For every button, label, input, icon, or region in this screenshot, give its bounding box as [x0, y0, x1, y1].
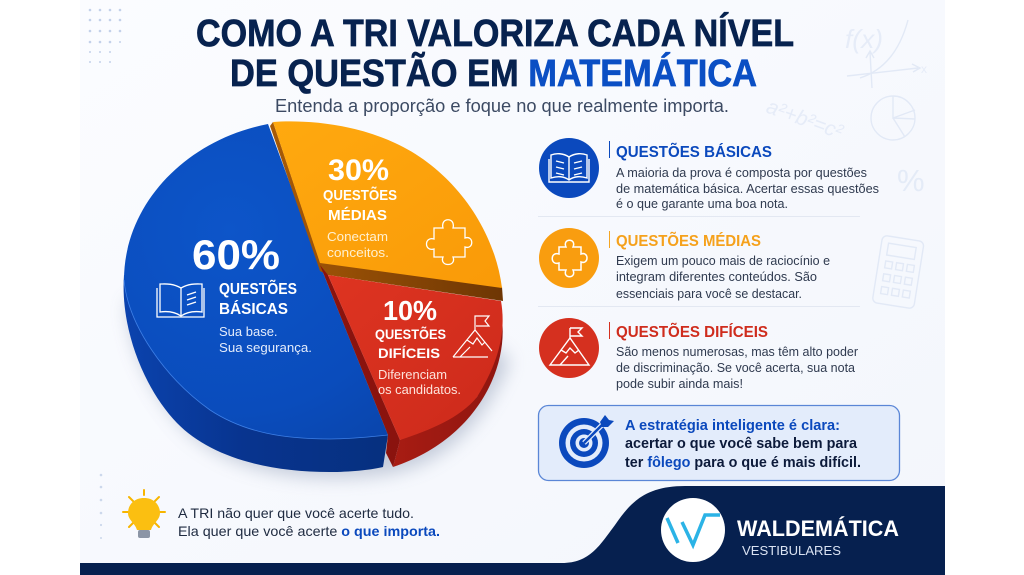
takeaway text: Ela quer que você acerte o que importa.: [178, 523, 440, 539]
item: questões básicas: [539, 138, 879, 211]
label: 10%: [375, 295, 461, 397]
description: [616, 166, 879, 211]
footer band: [80, 486, 945, 575]
label: 10%: Diferenciam: [378, 367, 447, 382]
label: 30%: QUESTÕES: [323, 186, 397, 204]
logo tagline: VESTIBULARES: [742, 543, 841, 558]
icon: open book: [157, 284, 204, 317]
label: 60%: QUESTÕES: [219, 280, 297, 298]
description: integram diferentes conteúdos. São: [616, 270, 817, 284]
callout text: ter fôlego para o que é mais difícil.: [625, 454, 861, 471]
slice: 30% médias: [270, 121, 503, 301]
description: A maioria da prova é composta por questões: [616, 166, 867, 180]
icon: puzzle badge: [539, 228, 599, 288]
title: [196, 11, 794, 95]
title: COMO A TRI VALORIZA CADA NÍVEL: [196, 11, 794, 55]
label: 10%: 10%: [383, 295, 437, 326]
slice: 10% difíceis: [320, 265, 503, 467]
takeaway text: A TRI não quer que você acerte tudo.: [178, 505, 414, 521]
label: 60%: [192, 231, 312, 355]
description: Exigem um pouco mais de raciocínio e: [616, 254, 830, 268]
label: 60%: BÁSICAS: [219, 301, 288, 318]
icon: light bulb: [123, 490, 165, 538]
label: 30%: Conectam: [327, 229, 388, 244]
callout text: A estratégia inteligente é clara:: [625, 417, 840, 434]
pie chart: [124, 121, 510, 478]
decorative dot grid top left: [89, 9, 121, 63]
pie drop shadow: [128, 300, 510, 478]
heading: QUESTÕES MÉDIAS: [616, 230, 761, 250]
description: essenciais para você se destacar.: [616, 287, 802, 301]
subtitle: Entenda a proporção e foque no que realmente importa.: [275, 96, 729, 116]
label: 60%: Sua segurança.: [219, 340, 312, 355]
item: questões difíceis: [539, 318, 858, 391]
icon: target: [559, 415, 614, 468]
label: 30%: 30%: [328, 154, 389, 187]
description: pode subir ainda mais!: [616, 377, 743, 391]
heading: QUESTÕES DIFÍCEIS: [616, 321, 768, 341]
description: [616, 345, 858, 391]
icon: book badge: [539, 138, 599, 198]
logo: Waldemática: [661, 498, 899, 562]
takeaway text: [178, 505, 440, 539]
icon: puzzle piece: [426, 220, 472, 264]
callout: estratégia: [538, 406, 900, 480]
description: de discriminação. Se você acerta, sua nota: [616, 361, 855, 375]
callout text: [625, 417, 861, 471]
slice: 60% básicas: [124, 124, 388, 472]
description: São menos numerosas, mas têm alto poder: [616, 345, 858, 359]
description: de matemática básica. Acertar essas questões: [616, 182, 879, 196]
label: 30%: conceitos.: [327, 245, 389, 260]
description: é o que garante uma boa nota.: [616, 197, 788, 211]
accent bar: [609, 231, 610, 248]
item: questões médias: [539, 228, 830, 301]
label: 10%: DIFÍCEIS: [378, 345, 440, 361]
label: 10%: os candidatos.: [378, 382, 461, 397]
icon: mountain with flag: [453, 316, 492, 357]
decorative math doodles: %: [897, 163, 925, 198]
title: DE QUESTÃO EM MATEMÁTICA: [230, 51, 757, 95]
label: 60%: Sua base.: [219, 324, 278, 339]
decorative dots lower left: [100, 474, 102, 539]
heading: QUESTÕES BÁSICAS: [616, 141, 772, 161]
callout text: acertar o que você sabe bem para: [625, 435, 858, 452]
description: [616, 254, 830, 301]
decorative math doodles: a²+b²=c²: [763, 95, 847, 144]
logo wordmark: WALDEMÁTICA: [737, 516, 899, 541]
label: 30%: [323, 154, 397, 260]
decorative math doodles: [763, 20, 927, 309]
decorative math doodles: x: [921, 62, 927, 76]
accent bar: [609, 141, 610, 158]
label: 60%: 60%: [192, 231, 280, 278]
label: 10%: QUESTÕES: [375, 325, 446, 342]
icon: mountain badge: [539, 318, 599, 378]
logo badge: [661, 498, 725, 562]
accent bar: [609, 322, 610, 339]
decorative math doodles: f(x): [845, 24, 883, 54]
label: 30%: MÉDIAS: [328, 207, 387, 224]
